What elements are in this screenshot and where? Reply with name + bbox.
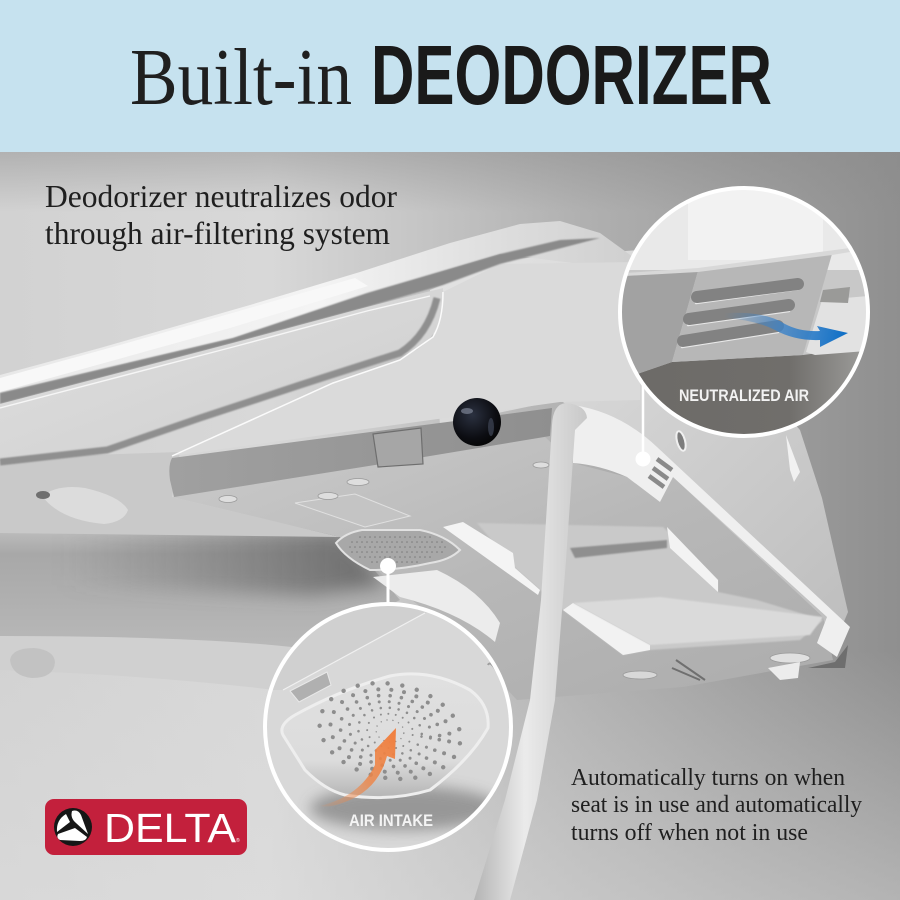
- neutralized air label: NEUTRALIZED AIR: [679, 387, 809, 405]
- seat side panel: [0, 288, 443, 460]
- side tab: [487, 662, 496, 672]
- orange air arrow: [320, 728, 396, 806]
- callout leader: neutralized air: [636, 385, 650, 466]
- underside: [172, 437, 833, 700]
- screw holes: [219, 462, 549, 502]
- front strip: [169, 408, 552, 497]
- auto on/off text: turns off when not in use: [571, 820, 808, 846]
- left panel: [622, 272, 698, 374]
- title: Built-in: [130, 34, 352, 122]
- seat base dark inner: [60, 530, 385, 595]
- top panel edge: [625, 248, 850, 276]
- auto on/off text: [571, 765, 862, 846]
- product: toilet seat underside: [0, 221, 850, 900]
- block recess: [820, 287, 850, 303]
- intro text: Deodorizer neutralizes odor: [45, 179, 398, 214]
- strip square: [373, 428, 423, 467]
- logo emblem: [54, 808, 92, 846]
- air intake label: AIR INTAKE: [349, 812, 433, 830]
- side screw slot: [675, 430, 687, 452]
- lower rim of seat base: [0, 636, 300, 690]
- C-shaped air intake housing: [373, 570, 500, 642]
- seat base foot: [10, 648, 55, 678]
- underside hatch: [295, 494, 410, 527]
- body front: [172, 262, 640, 456]
- tray: [443, 522, 823, 655]
- blue air arrow: [725, 313, 848, 347]
- tray lip lower: [563, 603, 650, 655]
- logo wordmark: DELTA: [104, 805, 237, 851]
- underside lower details: [623, 645, 848, 680]
- circle base fill: [628, 270, 865, 358]
- tray slot: [570, 540, 667, 558]
- upper wall: [630, 204, 858, 270]
- tray lip left: [443, 522, 540, 595]
- intro text: [45, 179, 398, 251]
- upper seat base surface: [0, 452, 340, 537]
- perforation dots: [318, 681, 462, 782]
- intro text: through air-filtering system: [45, 216, 390, 251]
- Delta logo: [45, 799, 247, 855]
- seat base shadow region: [0, 530, 400, 650]
- auto on/off text: seat is in use and automatically: [571, 792, 862, 818]
- auto on/off text: Automatically turns on when: [571, 765, 845, 791]
- exhaust vent grille: [649, 459, 672, 487]
- vent panel: [672, 254, 832, 362]
- black sensor knob: [453, 398, 501, 446]
- power cable: [474, 403, 587, 900]
- title: [130, 28, 772, 122]
- tray wall right: [667, 527, 718, 592]
- panel white seam: [172, 292, 443, 456]
- pad shadow: [310, 786, 500, 830]
- air intake ring: [265, 604, 511, 850]
- vent slots: [682, 284, 798, 347]
- panel bright seam: [0, 296, 430, 408]
- title banner: [0, 0, 900, 152]
- panel recess: [0, 298, 437, 462]
- dark floor: [638, 352, 860, 434]
- air intake grille on seat: [336, 530, 460, 570]
- registered mark: ®: [236, 837, 240, 844]
- seat lid: [0, 221, 640, 393]
- callout circle: air intake: [260, 600, 520, 855]
- intake pad: [282, 674, 488, 798]
- right body: [430, 250, 848, 650]
- tray lower plateau: [573, 597, 823, 645]
- tray surface: [477, 523, 823, 655]
- bumper: [36, 487, 128, 524]
- callout circle: neutralized air: [618, 186, 870, 438]
- lid dark band: [0, 238, 600, 404]
- clip tab: [290, 672, 331, 702]
- side clip: [786, 435, 800, 482]
- upper plate: [260, 600, 520, 690]
- neutralized air ring: [620, 188, 868, 436]
- white block: [806, 296, 866, 355]
- white rim: [573, 405, 850, 657]
- lid bright edge: [0, 278, 368, 392]
- callout leader: air intake: [380, 558, 396, 606]
